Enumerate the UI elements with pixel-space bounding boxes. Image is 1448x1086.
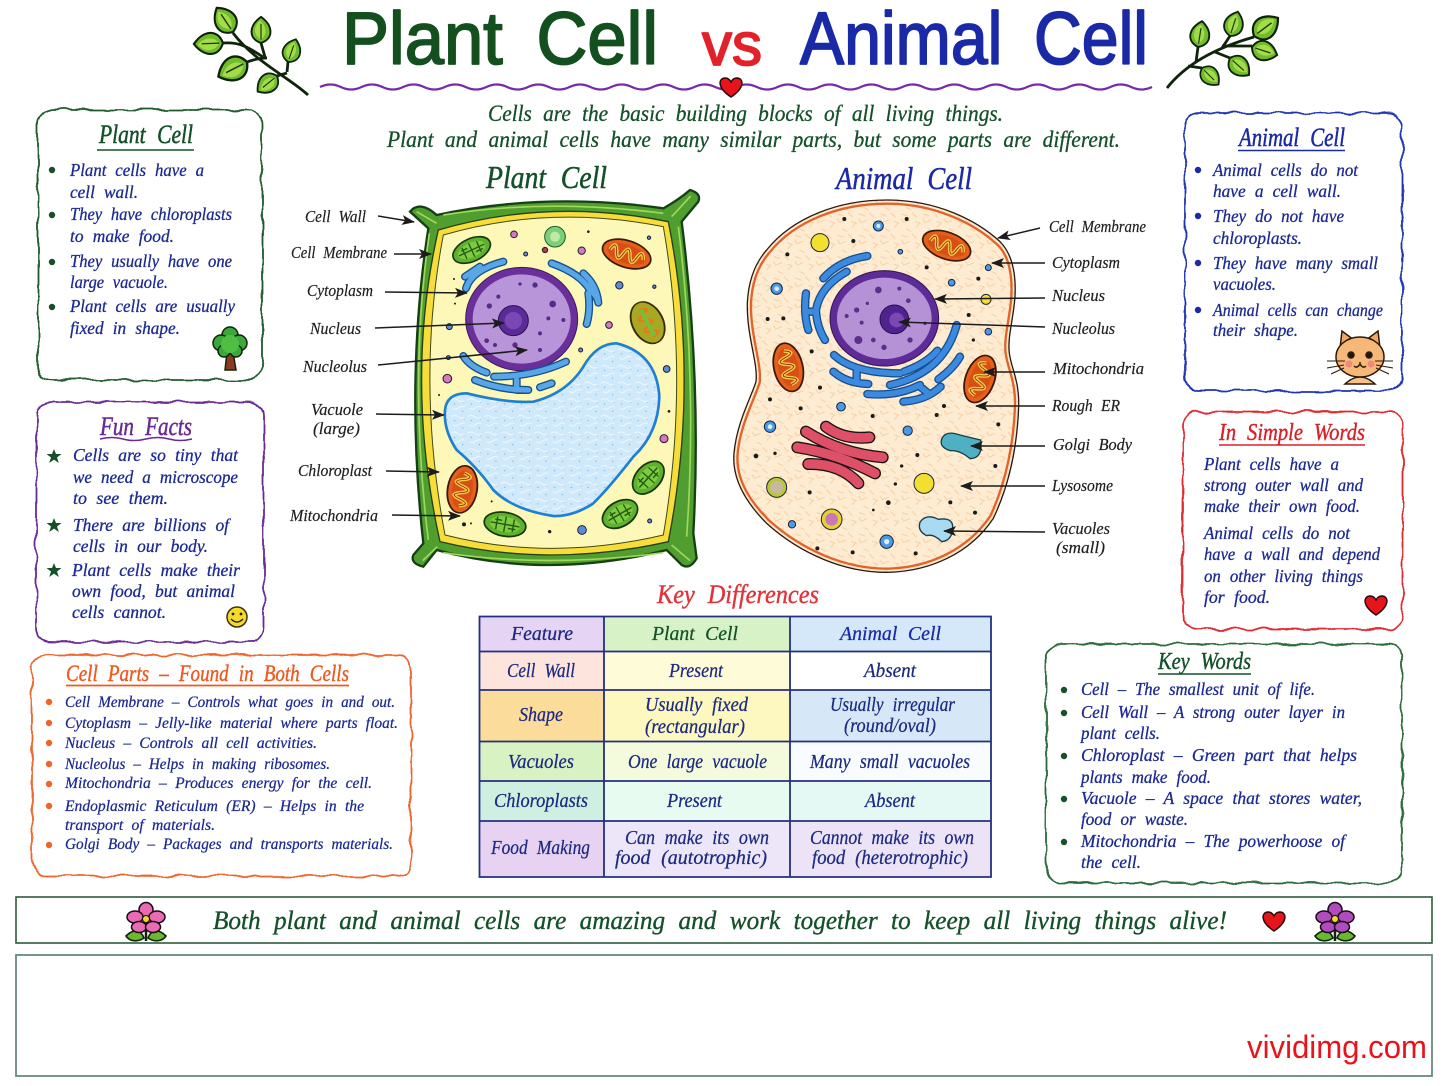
icon: heart bbox=[1263, 912, 1285, 931]
table text: Usually irregular bbox=[830, 695, 955, 716]
heading: Key Differences: Key Differences bbox=[656, 580, 819, 609]
text block: make their own food. bbox=[1204, 496, 1360, 516]
table text: Feature bbox=[510, 624, 573, 645]
icon: pink flower bbox=[126, 902, 166, 941]
bullet list: chloroplasts. bbox=[1213, 228, 1302, 248]
vacuole bbox=[445, 343, 659, 516]
bullet list: Golgi Body – Packages and transports materials. bbox=[65, 836, 393, 853]
table text: Many small vacuoles bbox=[809, 752, 970, 773]
heading: Cell Parts: Cell Parts – Found in Both Cells bbox=[66, 661, 349, 686]
table text bbox=[490, 624, 974, 869]
label: Vacuoles (small): Vacuoles bbox=[1052, 519, 1110, 538]
icon: right leafy branch bbox=[1167, 9, 1285, 91]
banner: closing message bbox=[16, 897, 1432, 943]
bullet list: Nucleolus – Helps in making ribosomes. bbox=[64, 756, 330, 773]
heading: Key Words: Key Words bbox=[1157, 649, 1251, 675]
label: Vacuole (large) bbox=[311, 400, 444, 438]
table text: Absent bbox=[863, 791, 916, 812]
panel: key words bbox=[1046, 644, 1402, 883]
bullet list: Plant cells are usually bbox=[69, 296, 235, 316]
table text: Cannot make its own bbox=[810, 828, 974, 849]
subtitle bbox=[386, 101, 1120, 152]
star list: own food, but animal bbox=[72, 581, 235, 601]
table text: Vacuoles bbox=[508, 752, 574, 773]
subtitle: Cells are the basic building blocks of all living things. bbox=[488, 101, 1003, 126]
vacuole: teal bbox=[941, 433, 981, 459]
bullet list: cell wall. bbox=[70, 182, 138, 202]
plant cell labels and arrows bbox=[289, 207, 527, 525]
bullet list: Mitochondria – Produces energy for the cell. bbox=[64, 775, 372, 792]
heading: Animal Cell diagram: Animal Cell bbox=[834, 160, 972, 196]
label: Vacuole (large): (large) bbox=[313, 419, 360, 438]
bullet list: They have many small bbox=[1213, 253, 1378, 273]
bullet list: Chloroplast – Green part that helps bbox=[1081, 745, 1357, 765]
nucleolus bbox=[498, 306, 528, 336]
cell wall bbox=[410, 190, 699, 567]
table text: One large vacuole bbox=[628, 752, 767, 773]
star list: Cells are so tiny that bbox=[73, 445, 239, 465]
star list bbox=[46, 445, 241, 622]
star list: There are billions of bbox=[73, 515, 232, 535]
text block: Animal cells do not bbox=[1203, 523, 1351, 543]
panel: animal cell facts bbox=[1185, 113, 1402, 391]
table text: food (autotrophic) bbox=[615, 848, 767, 869]
table text: Present bbox=[666, 791, 723, 812]
label: Cell Membrane bbox=[998, 217, 1146, 238]
text block: on other living things bbox=[1204, 566, 1363, 586]
bullet list: to make food. bbox=[70, 226, 174, 246]
table text: Cell Wall bbox=[507, 661, 575, 682]
text block: Plant cells have a bbox=[1203, 454, 1339, 474]
table: key differences bbox=[480, 616, 991, 877]
nucleus bbox=[830, 271, 939, 366]
bullet list: Plant cells have a bbox=[69, 160, 204, 180]
icon: cat bbox=[1327, 331, 1393, 384]
label: Nucleolus bbox=[302, 350, 527, 376]
label: Mitochondria: Mitochondria bbox=[289, 506, 378, 525]
banner text: Both plant and animal cells are amazing and work together to keep all living things alive! bbox=[213, 906, 1227, 935]
label: Nucleolus: Nucleolus bbox=[302, 357, 367, 376]
title: vs: vs bbox=[702, 11, 762, 78]
nucleus bbox=[466, 267, 578, 371]
text block: for food. bbox=[1204, 587, 1270, 607]
table text: Can make its own bbox=[625, 828, 769, 849]
diagram: animal cell bbox=[734, 200, 1019, 572]
icon: tree bbox=[213, 327, 247, 370]
bullet list: the cell. bbox=[1081, 852, 1141, 872]
bullet list: Cell Wall – A strong outer layer in bbox=[1081, 702, 1345, 722]
heading: Plant Cell diagram: Plant Cell bbox=[485, 159, 607, 195]
bullet list bbox=[1061, 679, 1362, 872]
label: Nucleolus bbox=[899, 319, 1115, 338]
chloroplasts bbox=[449, 231, 670, 540]
label: Rough ER: Rough ER bbox=[1051, 396, 1120, 415]
text block: have a wall and depend bbox=[1204, 544, 1381, 564]
label: Chloroplast: Chloroplast bbox=[298, 461, 372, 480]
small vesicles bbox=[438, 226, 670, 534]
diagram: plant cell bbox=[410, 190, 699, 567]
label: Mitochondria: Mitochondria bbox=[1052, 359, 1144, 378]
table cell fills bbox=[480, 617, 991, 877]
bullet list: Animal cells do not bbox=[1212, 160, 1359, 180]
label: Nucleus: Nucleus bbox=[309, 319, 361, 338]
star list: we need a microscope bbox=[73, 467, 238, 487]
bullet list: their shape. bbox=[1213, 320, 1298, 340]
bullet list bbox=[46, 694, 398, 853]
bullet list: food or waste. bbox=[1081, 809, 1188, 829]
table text: Animal Cell bbox=[838, 624, 941, 645]
label: Nucleolus: Nucleolus bbox=[1051, 319, 1115, 338]
bullet list: plant cells. bbox=[1079, 723, 1160, 743]
text block bbox=[1203, 454, 1381, 607]
label: Cell Membrane: Cell Membrane bbox=[291, 243, 387, 262]
label: Vacuoles (small) bbox=[944, 519, 1110, 557]
wavy title underline bbox=[320, 84, 1152, 90]
panel: cell parts found in both bbox=[32, 655, 411, 876]
bullet list bbox=[49, 160, 235, 338]
bullet list: transport of materials. bbox=[65, 817, 215, 834]
bullet list: They have chloroplasts bbox=[70, 204, 232, 224]
nucleolus bbox=[880, 305, 909, 334]
icon: purple flower bbox=[1315, 902, 1355, 941]
golgi body bbox=[797, 427, 883, 483]
mitochondria bbox=[444, 234, 672, 515]
label: Golgi Body: Golgi Body bbox=[1053, 435, 1133, 454]
table text: Plant Cell bbox=[651, 624, 738, 645]
bullet list: plants make food. bbox=[1079, 767, 1211, 787]
bullet list: They do not have bbox=[1213, 206, 1344, 226]
label: Cell Membrane: Cell Membrane bbox=[1049, 217, 1146, 236]
label: Nucleus: Nucleus bbox=[1051, 286, 1105, 305]
bullet list: fixed in shape. bbox=[70, 318, 180, 338]
icon: heart bbox=[1365, 596, 1387, 615]
bullet list bbox=[1195, 160, 1383, 340]
cytoplasm bbox=[430, 217, 677, 548]
bullet list: Endoplasmic Reticulum (ER) – Helps in the bbox=[64, 798, 364, 815]
label: Nucleus bbox=[309, 319, 504, 338]
table text: Usually fixed bbox=[645, 695, 748, 716]
star list: Plant cells make their bbox=[71, 560, 241, 580]
table text: Present bbox=[668, 661, 724, 682]
cell membrane bbox=[422, 211, 684, 555]
mitochondria bbox=[769, 225, 1002, 407]
icon: smiley bbox=[227, 607, 247, 627]
panel: plant cell facts bbox=[38, 110, 262, 380]
table text: food (heterotrophic) bbox=[812, 848, 968, 869]
watermark: vividimg.com bbox=[1247, 1029, 1427, 1065]
bullet list: Cytoplasm – Jelly-like material where parts float. bbox=[65, 715, 398, 732]
heading: In Simple Words: In Simple Words bbox=[1218, 420, 1365, 446]
icon: heart on underline bbox=[720, 78, 742, 97]
star list: cells in our body. bbox=[73, 536, 208, 556]
star list: cells cannot. bbox=[72, 602, 166, 622]
subtitle: Plant and animal cells have many similar parts, but some parts are different. bbox=[386, 127, 1120, 152]
table text: Shape bbox=[519, 705, 563, 726]
table text: (rectangular) bbox=[645, 717, 745, 738]
table text: Chloroplasts bbox=[494, 791, 588, 812]
text block: strong outer wall and bbox=[1204, 475, 1364, 495]
empty box bbox=[16, 955, 1432, 1076]
animal cell labels and arrows bbox=[899, 217, 1146, 557]
table text: Food Making bbox=[490, 838, 590, 859]
bullet list: have a cell wall. bbox=[1213, 181, 1341, 201]
title bbox=[342, 0, 1148, 80]
table text: Absent bbox=[862, 661, 917, 682]
label: Cell Wall: Cell Wall bbox=[305, 207, 366, 226]
star list: to see them. bbox=[73, 488, 168, 508]
bullet list: Cell – The smallest unit of life. bbox=[1081, 679, 1315, 699]
bullet list: They usually have one bbox=[70, 251, 232, 271]
panel: fun facts bbox=[36, 402, 264, 642]
vesicles and lysosomes bbox=[754, 217, 1000, 555]
vacuole: small bbox=[919, 517, 953, 542]
bullet list: Vacuole – A space that stores water, bbox=[1081, 788, 1362, 808]
bullet list: Animal cells can change bbox=[1212, 300, 1383, 320]
panel: in simple words bbox=[1183, 412, 1403, 629]
label: Cytoplasm bbox=[992, 253, 1120, 272]
cell membrane and cytoplasm bbox=[734, 200, 1019, 572]
heading: Plant Cell: Plant Cell bbox=[98, 120, 193, 149]
label: Vacuoles (small): (small) bbox=[1056, 538, 1105, 557]
icon: left leafy branch bbox=[194, 2, 308, 99]
bullet list: vacuoles. bbox=[1213, 274, 1276, 294]
label: Lysosome: Lysosome bbox=[1051, 476, 1113, 495]
rough ER bbox=[805, 256, 960, 402]
rough ER bbox=[463, 262, 598, 390]
heading: Fun Facts: Fun Facts bbox=[99, 412, 192, 441]
bullet list: large vacuole. bbox=[70, 272, 168, 292]
label: Cytoplasm: Cytoplasm bbox=[307, 281, 373, 300]
bullet list: Nucleus – Controls all cell activities. bbox=[64, 735, 317, 752]
label: Cell Wall bbox=[305, 207, 414, 226]
label: Vacuole (large): Vacuole bbox=[311, 400, 363, 419]
label: Cytoplasm: Cytoplasm bbox=[1052, 253, 1120, 272]
table text: (round/oval) bbox=[844, 716, 936, 737]
bullet list: Cell Membrane – Controls what goes in and out. bbox=[65, 694, 395, 711]
bullet list: Mitochondria – The powerhoose of bbox=[1080, 831, 1348, 851]
heading: Animal Cell: Animal Cell bbox=[1237, 123, 1345, 152]
